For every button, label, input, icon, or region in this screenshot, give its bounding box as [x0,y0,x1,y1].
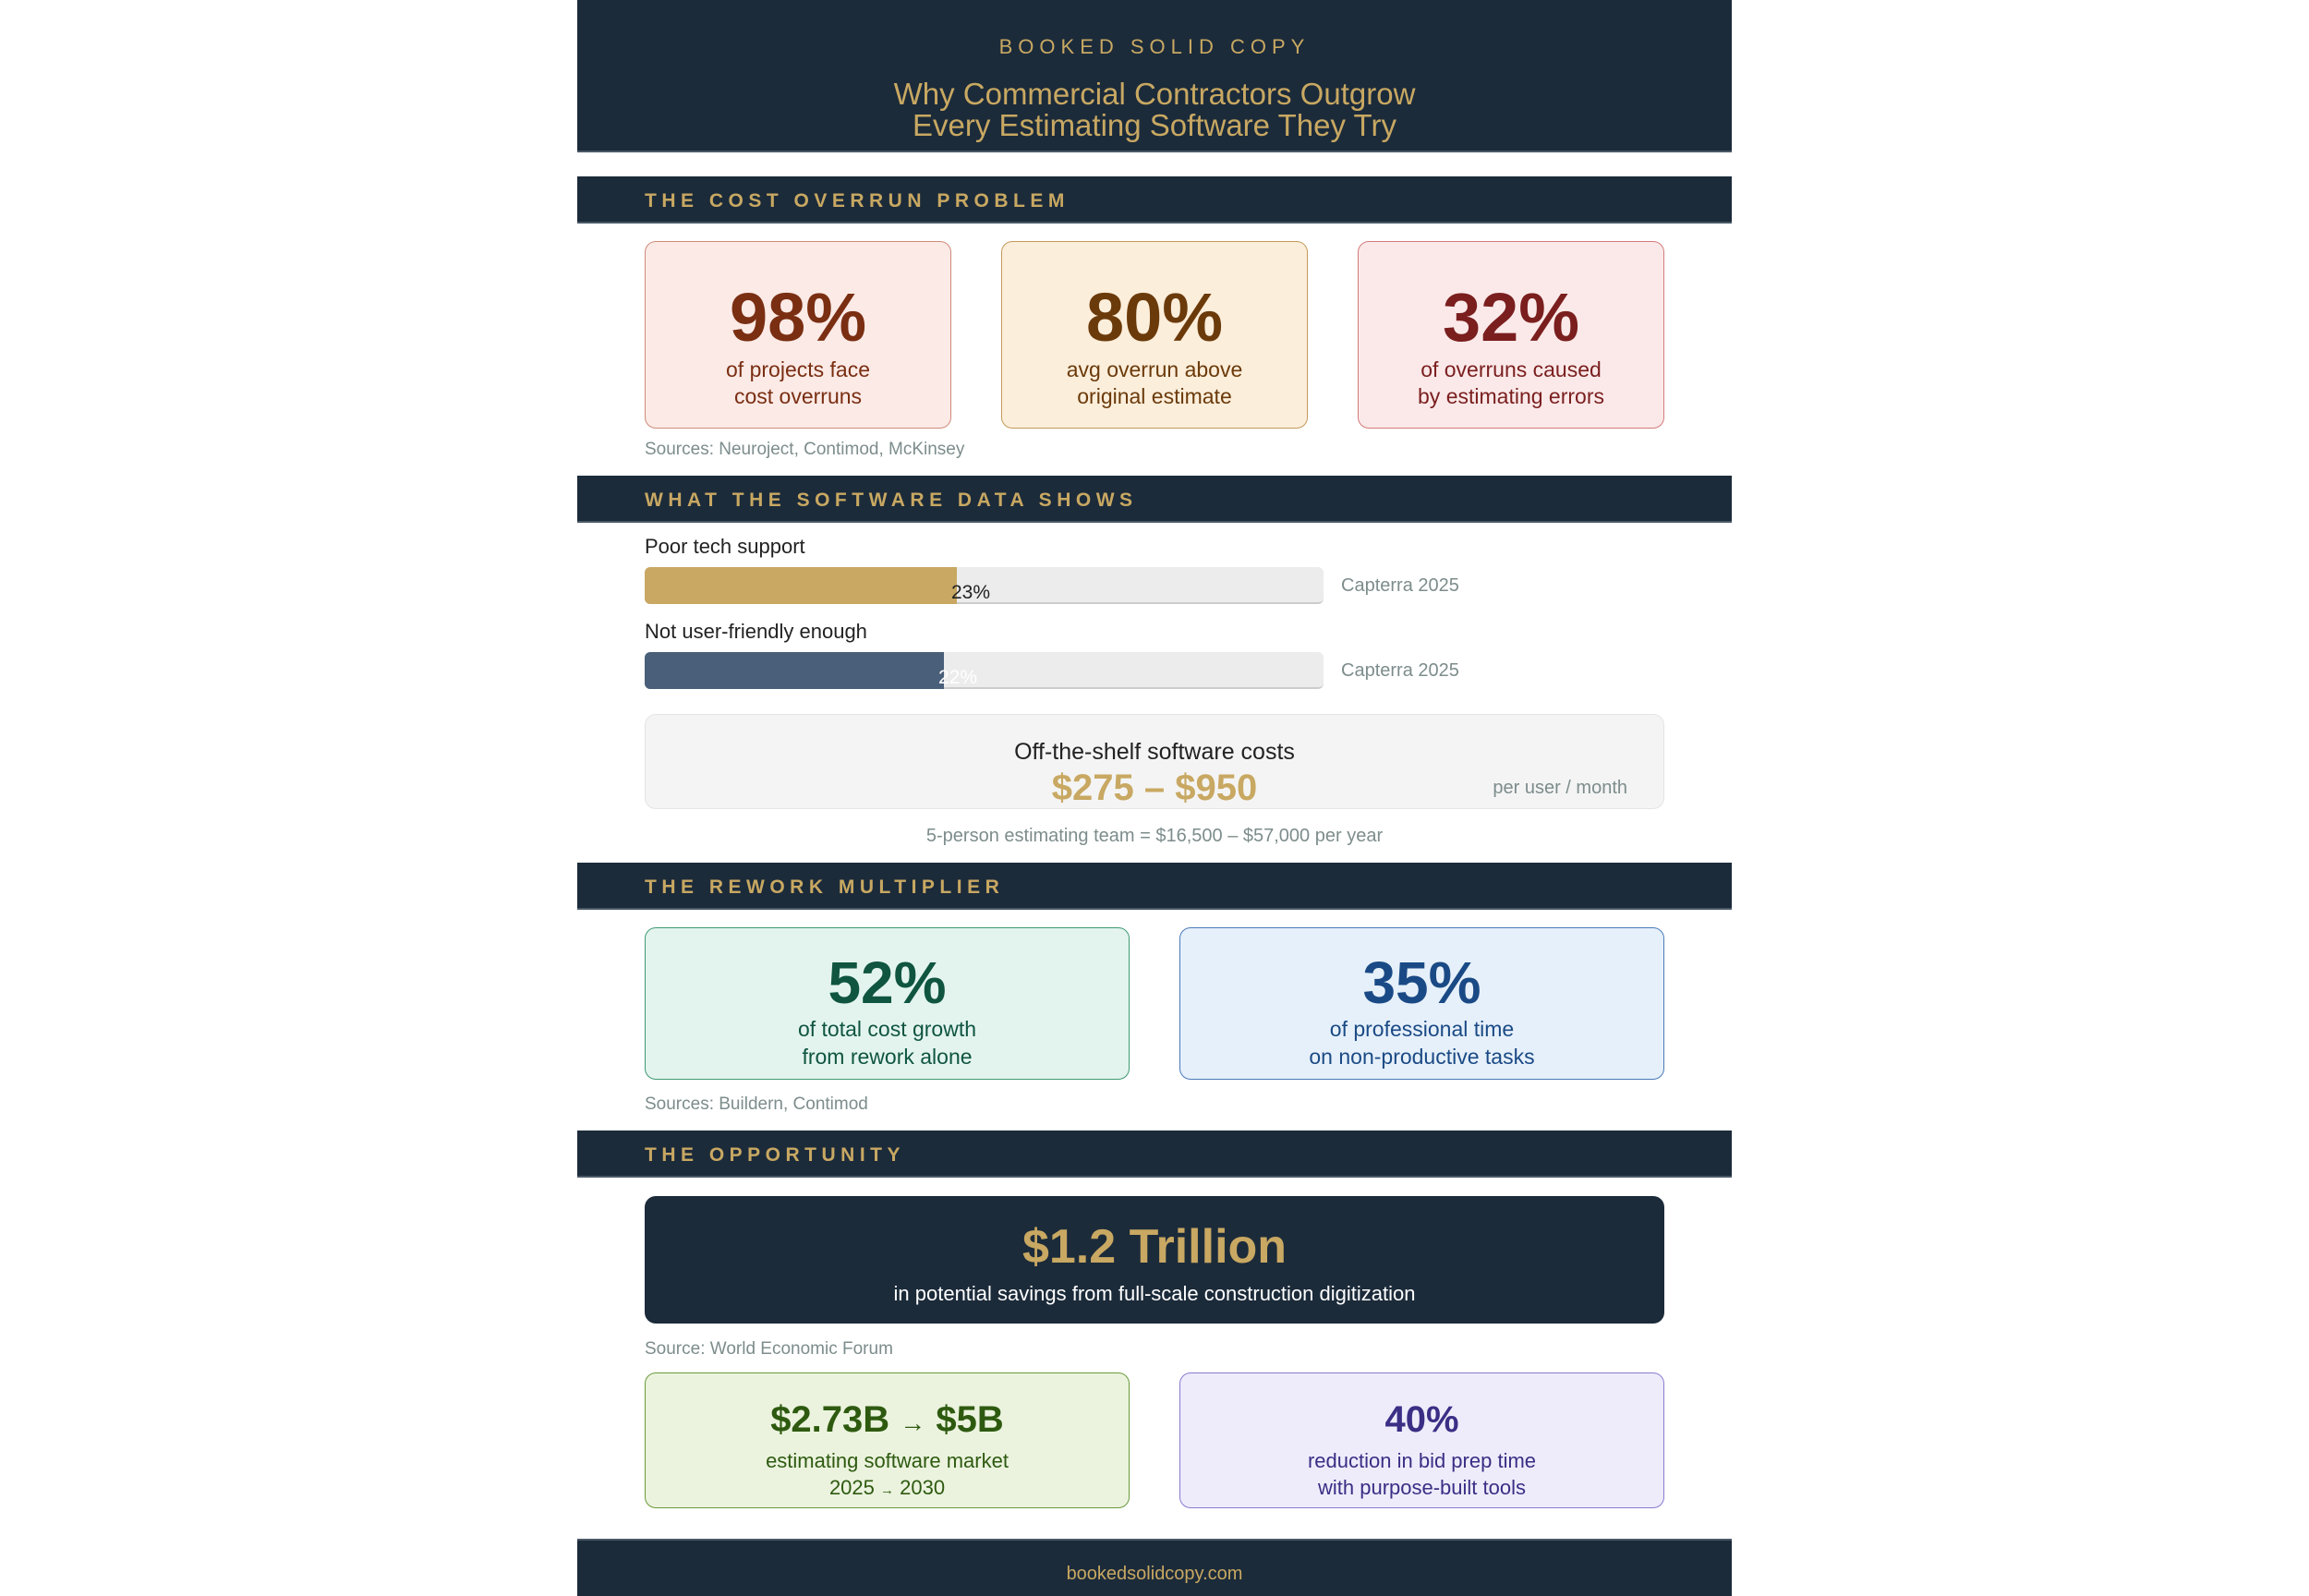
card: 32%: by estimating errors [1418,384,1604,408]
cost box [645,714,1664,809]
card: 98% [645,241,951,429]
card: 40%: 40% [1384,1399,1459,1440]
source 3: Source: World Economic Forum [645,1339,893,1359]
card: 98%: 98% [730,279,866,356]
card: 35%: of professional time [1330,1017,1514,1041]
card: 80% [1001,241,1308,429]
card: 40%: with purpose-built tools [1318,1476,1526,1499]
section bar: cost overrun: THE COST OVERRUN PROBLEM [645,190,1070,212]
bar chart: not user-friendly: 22% [938,667,977,688]
callout: $1.2 trillion [645,1196,1664,1324]
section bar: software data: WHAT THE SOFTWARE DATA SHOWS [645,490,1138,511]
card: 35%: 35% [1362,949,1481,1016]
bar chart: poor tech support: 23% [951,582,990,603]
section bar: rework: THE REWORK MULTIPLIER [645,877,1004,898]
sources 1: Sources: Neuroject, Contimod, McKinsey [645,440,964,459]
bar chart: poor tech support [645,535,1459,604]
section bar: opportunity: THE OPPORTUNITY [645,1144,905,1166]
bar chart: not user-friendly: Not user-friendly enough [645,620,867,643]
sources 2: Sources: Buildern, Contimod [645,1094,868,1114]
bar chart: poor tech support: Poor tech support [645,535,805,558]
card: 52%: 52% [828,949,947,1016]
card: market growth: estimating software market [766,1449,1009,1472]
card: market growth: $2.73B → $5B [770,1399,1004,1440]
callout: $1.2 trillion: $1.2 Trillion [1022,1220,1287,1274]
card: 52%: from rework alone [802,1045,973,1069]
callout: $1.2 trillion: in potential savings from full-scale construction digitization [894,1282,1415,1305]
card: 80%: avg overrun above [1067,357,1242,381]
card: market growth: 2025 → 2030 [829,1476,945,1499]
card: market growth [645,1372,1130,1508]
card: 80%: 80% [1086,279,1223,356]
card: 52%: of total cost growth [798,1017,976,1041]
card: 32% [1358,241,1664,429]
bar chart: not user-friendly [645,620,1459,689]
card: 52% [645,927,1130,1080]
card: 80%: original estimate [1077,384,1232,408]
bar chart: poor tech support: Capterra 2025 [1341,575,1459,596]
footer: bookedsolidcopy.com [1067,1564,1242,1584]
card: 98%: of projects face [726,357,870,381]
card: 40%: reduction in bid prep time [1308,1449,1536,1472]
card: 32%: 32% [1443,279,1579,356]
team cost note: 5-person estimating team = $16,500 – $57,000 per year [926,826,1383,846]
section bar: software data [577,476,1732,523]
card: 32%: of overruns caused [1420,357,1602,381]
title: Every Estimating Software They Try [913,108,1396,142]
bar chart: not user-friendly: Capterra 2025 [1341,660,1459,681]
brand name: BOOKED SOLID COPY [999,35,1310,58]
card: 40% [1179,1372,1664,1508]
card: 98%: cost overruns [734,384,862,408]
section bar: cost overrun [577,176,1732,224]
cost box: Off-the-shelf software costs [1014,739,1295,765]
cost box: per user / month [1493,778,1627,798]
card: 35%: on non-productive tasks [1309,1045,1535,1069]
card: 35% [1179,927,1664,1080]
header [577,0,1732,152]
title [894,77,1415,142]
cost box: $275 – $950 [1052,768,1257,808]
section bar: opportunity [577,1130,1732,1178]
section bar: rework [577,863,1732,910]
footer [577,1539,1732,1596]
title: Why Commercial Contractors Outgrow [894,77,1415,111]
